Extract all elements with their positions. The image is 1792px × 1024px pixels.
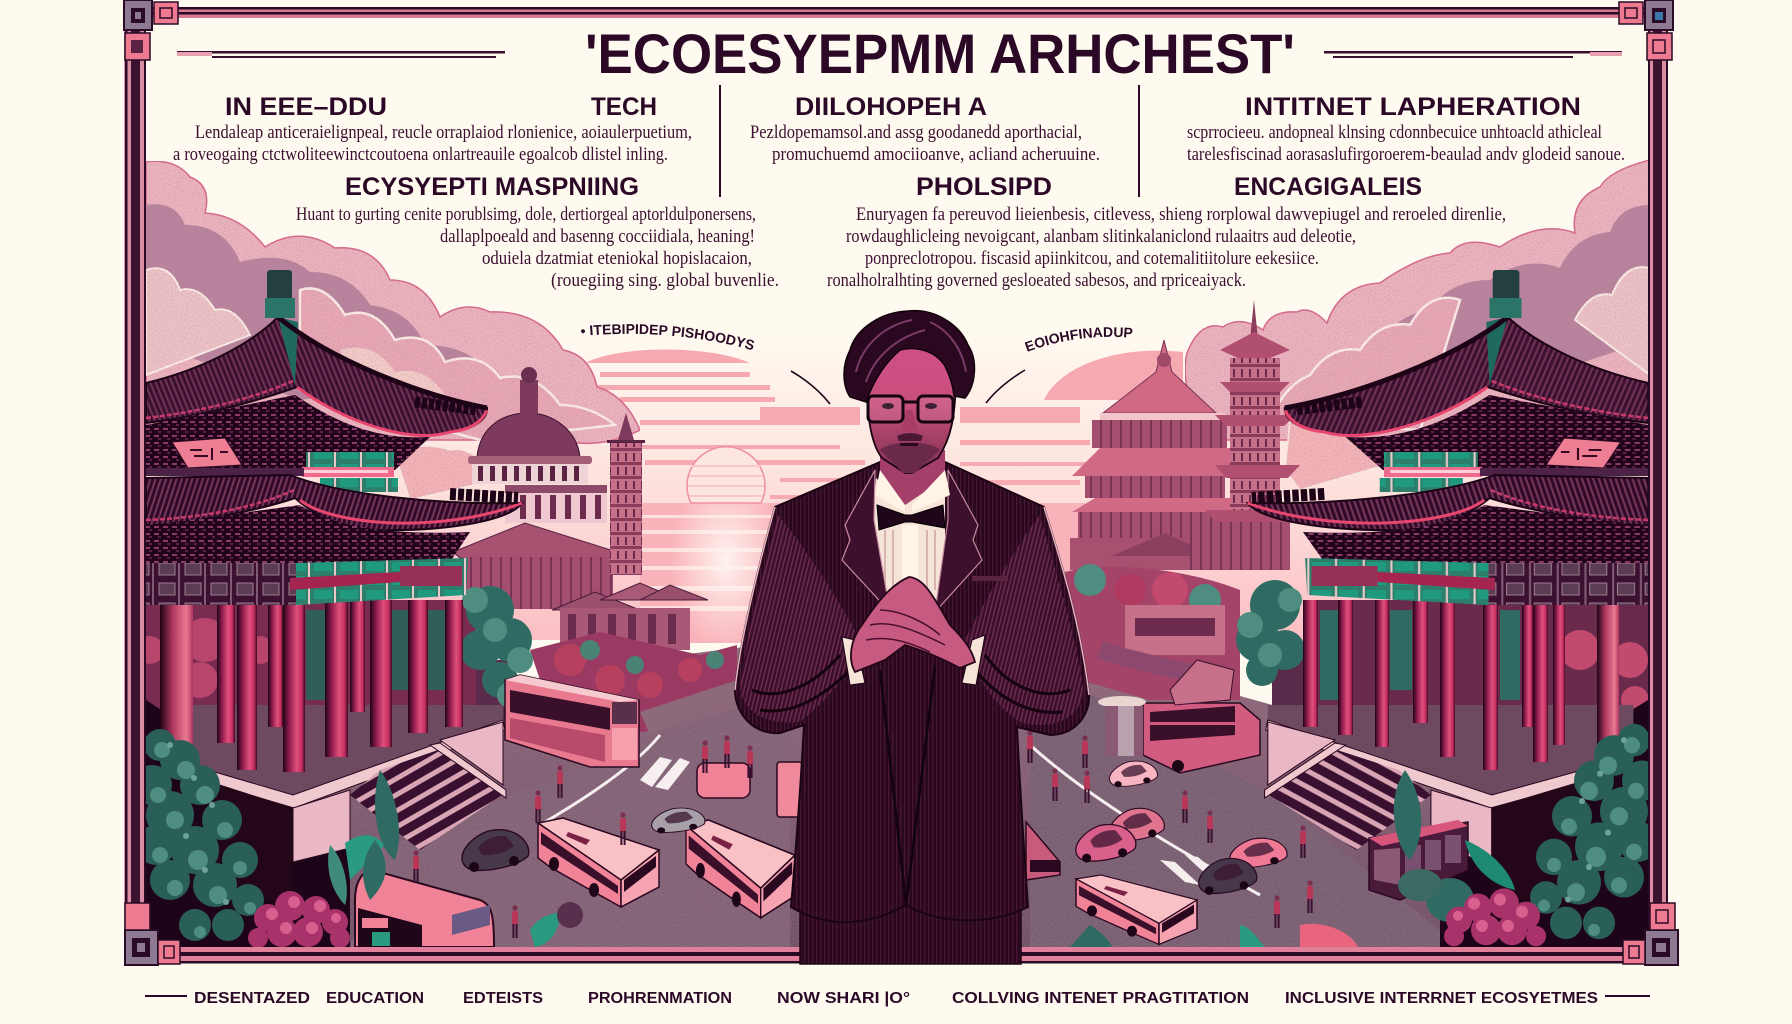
text block: in eee-ddu tech: a roveogaing ctctwoliteewinctcoutoena onlartreauile egoalcob dlistel inling. [173,144,668,165]
clasped hands [851,577,975,672]
cars left [462,808,705,872]
footer strip: PROHRENMATION [588,990,732,1007]
column divider right [1138,85,1140,197]
cloud bank right [1185,160,1650,490]
text block: in eee-ddu tech [173,93,692,165]
kiosk bus bottom left [355,870,494,947]
corner ornament bottom left [125,903,180,965]
beard [880,442,940,473]
footer strip [145,990,1650,1007]
callout right [985,327,1132,404]
text block: dilohopeh a [750,93,1100,165]
plants left [328,770,583,947]
text block: pholsipd and encagigaleis: ponpreclotropou. fiscasid apiinkitcou, and cotemalitiitolure eekesiice. [865,248,1319,269]
footer strip: EDTEISTS [463,990,543,1007]
callout left: • ITEBIPIDEP PISHOODYS [581,324,754,350]
bus near steps [538,818,659,907]
footer strip: NOW SHARI |O° [777,990,910,1007]
neck [880,450,945,505]
text block: pholsipd and encagigaleis: ronalholralhting governed gesloeated sabesos, and rpriceaiyack. [827,270,1246,291]
distant tiered palace right [1070,340,1230,570]
text block: ecysyepti maspniing [296,173,779,291]
low hall buildings [552,583,708,650]
text block: pholsipd and encagigaleis: rowdaughlicleing nevoigcant, alanbam slitinkalaniclond rulaaitrs aud deleotie, [846,226,1356,247]
text block: intitnet lapheration: scprrocieeu. andopneal klnsing cdonnbecuice unhtoacld athicleal [1187,122,1602,143]
left temple columns [160,600,463,772]
bow tie [877,505,945,530]
text block: dilohopeh a: DIILOHOPEH A [795,93,987,121]
corner ornament top left [124,0,178,60]
jacket body [735,462,1089,922]
text block: in eee-ddu tech: Lendaleap anticeraielignpeal, reucle orraplaiod rlonienice, aoiaulerpuetium, [195,122,692,143]
lapels [842,470,890,612]
trousers [800,905,1021,964]
corner ornament bottom right [1623,903,1678,965]
double-decker bus right [1143,703,1260,773]
ground and road [300,640,1510,947]
eyes [882,403,937,409]
dark ground left [146,700,350,947]
bus near man [686,820,795,918]
title rule right [1324,51,1622,58]
text block: dilohopeh a: Pezldopemamsol.and assg goodanedd aporthacial, [750,122,1082,143]
footer strip: COLLVING INTENET PRAGTITATION [952,990,1249,1007]
text block: pholsipd and encagigaleis: Enuryagen fa pereuvod lieienbesis, citlevess, shieng rorplowal dawvepiugel and reroeled direnlie, [856,204,1506,225]
text block: ecysyepti maspniing: oduiela dzatmiat eteniokal hopislacaion, [482,248,752,269]
text block: pholsipd and encagigaleis [827,173,1506,291]
breast pocket [972,576,1008,581]
shirt [872,478,945,600]
distant domed building [453,367,617,609]
cuffs [842,637,865,685]
head and face [867,348,956,473]
bus shelter [1098,696,1146,756]
pink van [697,763,750,798]
footer strip: INCLUSIVE INTERRNET ECOSYETMES [1285,990,1598,1007]
text block: ecysyepti maspniing: Huant to gurting cenite porublsimg, dole, dertiorgeal aptorldulponersens, [296,204,756,225]
callout left [581,324,830,404]
hillside foliage right [1065,564,1240,700]
nose [902,410,918,432]
foliage lower right [1444,724,1662,946]
text block: pholsipd and encagigaleis: PHOLSIPD [916,173,1052,201]
footer strip: EDUCATION [326,990,424,1007]
left temple roofs [146,270,522,605]
title rule left [177,51,505,58]
pedestrians right [1027,730,1313,928]
glasses [868,396,953,422]
text block: intitnet lapheration [1187,93,1625,165]
footer strip: DESENTAZED [194,990,310,1007]
corner ornament top right [1619,0,1673,60]
plants right [1070,770,1515,947]
hair [844,311,974,402]
callout right: EOIOHFINADUP [1024,327,1132,352]
jacket front opening [880,665,935,905]
right temple roofs [1248,270,1648,605]
burgundy bus right [1369,820,1468,900]
sun [687,447,765,503]
text block: ecysyepti maspniing: dallaplpoeald and basenng cocciidiala, heaning! [440,226,755,247]
pink bus at edge [777,762,802,817]
pedestrians left [413,735,753,938]
foliage lower left [132,729,350,948]
garden behind right temple [1272,600,1649,720]
distant pagoda tower right [1190,300,1300,570]
left temple platform [160,705,506,900]
hillside foliage left [530,632,737,740]
road markings [540,735,1260,895]
pink bus right foreground [1076,875,1197,944]
cars right [1076,761,1287,895]
panel: illustrated scene [132,160,1662,948]
text block: intitnet lapheration: INTITNET LAPHERATION [1245,93,1581,121]
right temple columns [1303,600,1619,770]
text block: pholsipd and encagigaleis: ENCAGIGALEIS [1234,173,1422,201]
central figure: man in velvet suit [735,311,1089,964]
text block: dilohopeh a: promuchuemd amociioanve, acliand acheruuine. [772,144,1100,165]
distant pagoda tower left [607,413,645,575]
cloud bank left [146,161,640,500]
double-decker bus left [505,675,639,767]
partial bus near man right [1026,822,1060,880]
right temple platform [1265,705,1633,900]
column divider left [719,85,721,197]
dark ground right [1440,700,1648,947]
text block: ecysyepti maspniing: ECYSYEPTI MASPNIING [345,173,639,201]
sleeve highlights [740,515,860,723]
text block: in eee-ddu tech: IN EEE–DDU [225,93,387,121]
text block: intitnet lapheration: tarelesfiscinad aorasaslufirgoroerem-beaulad andv glodeid sanoue. [1187,144,1625,165]
text block: ecysyepti maspniing: (rouegiing sing. global buvenlie. [551,270,779,291]
collar [875,470,905,512]
green trees [460,580,1305,708]
garden behind left temple [136,600,508,720]
tilted building [1170,660,1234,705]
text block: in eee-ddu tech: TECH [591,93,657,121]
title: 'ECOESYEPMM ARHCHEST' [585,22,1295,85]
sky with banded sunset [146,340,1648,650]
